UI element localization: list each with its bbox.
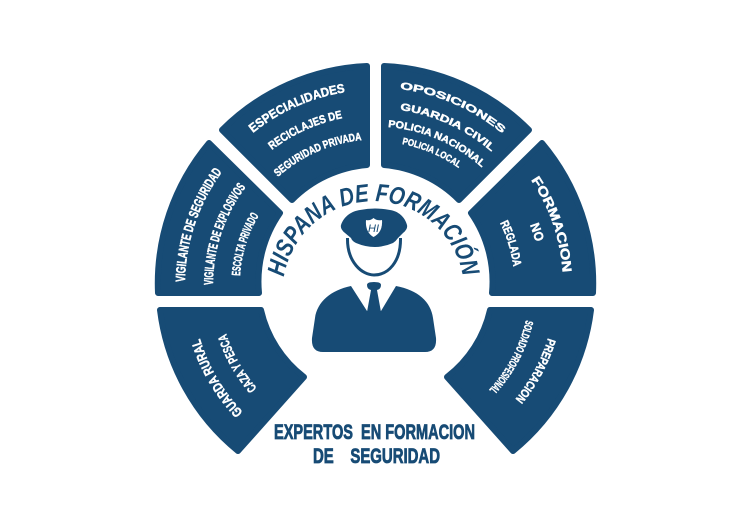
icon part: badge bbox=[366, 218, 382, 237]
icon: security guard bbox=[312, 208, 436, 352]
curved title: HISPANA DE FORMACIÓN bbox=[268, 184, 480, 277]
panel: oposiciones bbox=[381, 63, 532, 203]
text: formacion no reglada lines: FORMACION NO REGLADA bbox=[500, 176, 572, 272]
panel: vigilante de seguridad bbox=[154, 140, 284, 296]
icon part: tie bbox=[367, 282, 381, 312]
panel: especialidades bbox=[219, 63, 370, 203]
text: oposiciones lines: OPOSICIONES GUARDIA CIVIL POLICIA NACIONAL POLICIA LOCAL bbox=[388, 82, 506, 168]
icon part: jacket bbox=[312, 286, 436, 352]
text: vigilante lines: VIGILANTE DE SEGURIDAD VIGILANTE DE EXPLOSIVOS ESCOLTA PRIVADO bbox=[176, 168, 258, 285]
panel: formacion no reglada bbox=[468, 140, 596, 296]
panel: preparacion bbox=[444, 307, 594, 454]
text: guarda rural lines: GUARDA RURAL CAZA Y PESCA bbox=[192, 334, 256, 417]
panel: guarda rural bbox=[157, 307, 307, 454]
icon part: badge: HI bbox=[368, 223, 379, 235]
icon part: cap bbox=[341, 208, 407, 247]
icon part: face outline bbox=[347, 238, 401, 275]
text: preparacion lines: PREPARACION SOLDADO PROFESIONAL bbox=[488, 320, 556, 404]
tagline line 1: EXPERTOS EN FORMACION bbox=[274, 421, 475, 444]
tagline line 2: DE SEGURIDAD bbox=[313, 445, 440, 468]
text: especialidades lines: ESPECIALIDADES RECICLAJES DE SEGURIDAD PRIVADA bbox=[248, 84, 362, 176]
tagline bbox=[274, 421, 475, 468]
